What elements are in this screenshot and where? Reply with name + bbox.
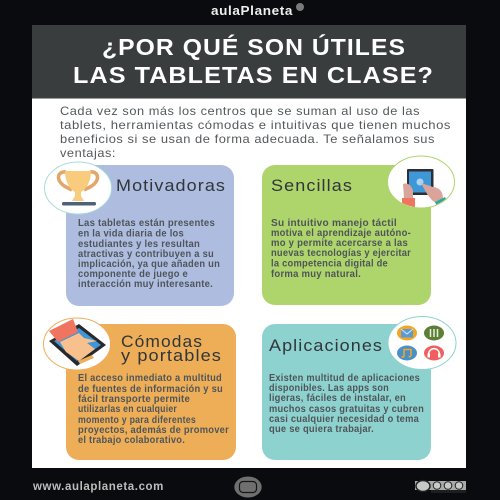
text: Cómodas body xyxy=(78,373,229,446)
text: Aplicaciones body: muchos casos gratuitas y cubren xyxy=(269,404,424,415)
heading: Aplicaciones: Aplicaciones xyxy=(269,337,383,355)
panel: Cómodas y portables xyxy=(44,318,236,460)
text: Aplicaciones body xyxy=(269,373,424,435)
panel: Sencillas xyxy=(262,156,454,305)
text: Motivadoras body: estudiantes y les resultan xyxy=(78,239,200,250)
text: Sencillas body: forma muy natural. xyxy=(271,269,361,280)
text: Motivadoras body: en la vida diaria de los xyxy=(78,228,184,240)
icon: tablet home button xyxy=(234,476,262,498)
heading: Cómodas y portables: y portables xyxy=(121,347,222,365)
text: Aplicaciones body: casi cualquier necesidad o tema xyxy=(269,414,419,425)
text: Motivadoras body: componente de juego e xyxy=(78,269,188,280)
text: Motivadoras body: implicación, ya que añaden un xyxy=(78,259,220,270)
text: Motivadoras body xyxy=(78,218,220,290)
icon: tablet touch xyxy=(388,156,454,210)
icon: trophy xyxy=(44,162,112,214)
panel: Motivadoras xyxy=(44,162,234,306)
text: Motivadoras body: atractivas y contribuyen a su xyxy=(78,249,214,260)
text: Sencillas body: Su intuitivo manejo táctil xyxy=(271,218,397,229)
heading: Cómodas y portables: Cómodas xyxy=(121,333,203,351)
text: Cómodas body: utilizarlas en cualquier xyxy=(78,404,177,415)
icon: hand on tablet xyxy=(44,318,110,370)
text: Cómodas body: El acceso inmediato a multitud xyxy=(78,373,222,384)
icon: creative commons badge xyxy=(415,480,466,493)
heading: Motivadoras: Motivadoras xyxy=(116,177,226,195)
text: Cómodas body: de fuentes de información y su xyxy=(78,384,223,395)
icon: app buttons xyxy=(388,316,456,370)
title banner xyxy=(32,25,466,98)
intro text xyxy=(60,104,451,160)
title banner: ¿POR QUÉ SON ÚTILES xyxy=(102,33,406,60)
text: Sencillas body xyxy=(271,218,411,280)
heading: Cómodas y portables xyxy=(121,333,222,365)
text: Cómodas body: momento y para diferentes xyxy=(78,415,196,426)
text: Sencillas body: nuevas tecnologías y ejercitar xyxy=(271,248,411,259)
text: Sencillas body: mo y permite acercarse a las xyxy=(271,238,408,249)
text: Motivadoras body: Las tabletas están presentes xyxy=(78,218,215,229)
text: Aplicaciones body: Existen multitud de aplicaciones xyxy=(269,373,420,384)
text: Aplicaciones body: disponibles. Las apps son xyxy=(269,383,389,394)
heading: Sencillas: Sencillas xyxy=(271,177,353,195)
text: Aplicaciones body: que se quiera trabajar. xyxy=(269,424,374,435)
text: Motivadoras body: interacción muy interesante. xyxy=(78,279,213,290)
text: Sencillas body: la competencia digital de xyxy=(271,258,388,270)
page panel xyxy=(32,25,466,468)
text: Aplicaciones body: ligeras, fáciles de instalar, en xyxy=(269,393,406,404)
website url: www.aulaplaneta.com xyxy=(32,481,164,493)
text: Sencillas body: motiva el aprendizaje autóno- xyxy=(271,228,411,239)
logo: aulaPlaneta: aulaPlaneta xyxy=(211,3,293,18)
text: Cómodas body: proyectos, además de promover xyxy=(78,425,229,436)
intro text: beneficios si se usan de forma adecuada. Te señalamos sus xyxy=(60,132,435,146)
intro text: tablets, herramientas cómodas e intuitivas que tienen muchos xyxy=(60,118,451,132)
intro text: ventajas: xyxy=(60,146,116,160)
intro text: Cada vez son más los centros que se suman al uso de las xyxy=(60,104,420,118)
title banner: LAS TABLETAS EN CLASE? xyxy=(73,62,434,88)
text: Cómodas body: fácil transporte permite xyxy=(78,394,190,405)
panel: Aplicaciones xyxy=(262,316,456,460)
text: Cómodas body: el trabajo colaborativo. xyxy=(78,435,185,446)
